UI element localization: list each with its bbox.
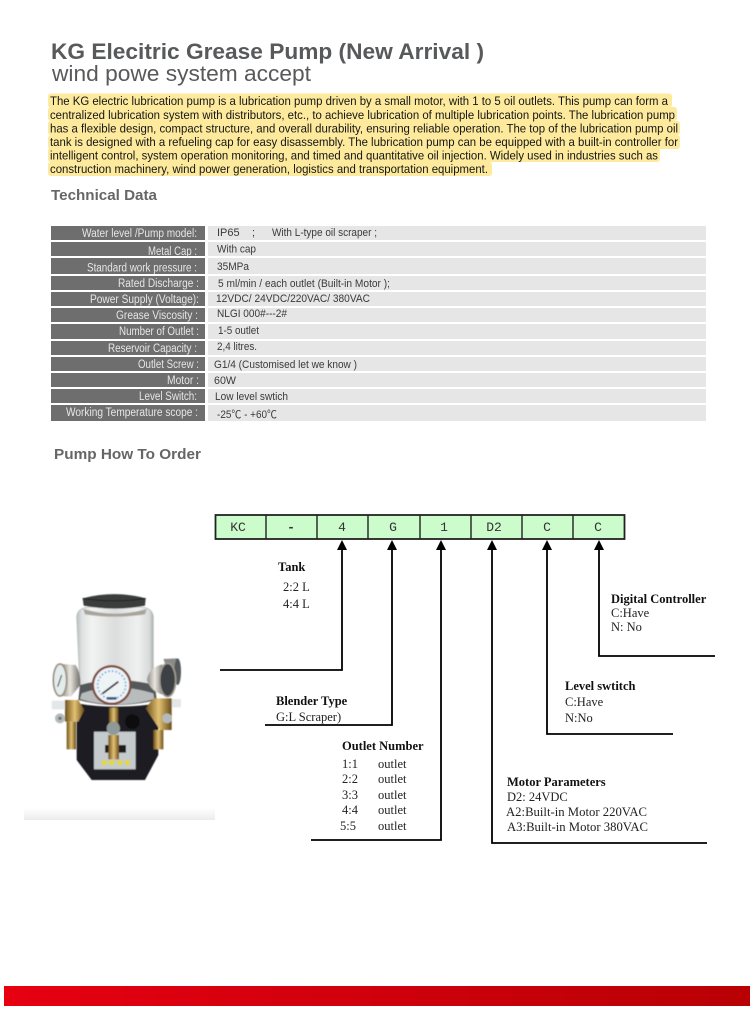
table labels: Metal Cap : <box>148 246 197 258</box>
table labels <box>66 228 199 419</box>
description text block <box>48 94 680 176</box>
description text block: intelligent control, system operation monitoring, and timed and quantitative oil injection. Widely used in industries such as <box>50 148 658 162</box>
right gauge <box>163 658 181 687</box>
text: motor parameters: A3:Built-in Motor 380VAC <box>507 820 648 834</box>
table labels: Grease Viscosity : <box>116 310 198 322</box>
text: blender type: Blender Type <box>276 694 348 708</box>
order code boxes: 4 <box>338 520 346 535</box>
arrow: motor parameters <box>487 540 707 843</box>
base ring <box>78 680 157 705</box>
brass fittings <box>65 700 84 722</box>
footer red bar <box>4 986 750 1006</box>
order code boxes: C <box>543 520 551 535</box>
text: motor parameters: A2:Built-in Motor 220VAC <box>506 805 647 819</box>
text: blender type: G:L Scraper) <box>276 710 341 724</box>
text: digital controller: N: No <box>611 620 642 634</box>
text: motor parameters: D2: 24VDC <box>507 790 568 804</box>
heading: pump how to order: Pump How To Order <box>54 447 201 463</box>
table labels: Reservoir Capacity : <box>108 343 197 355</box>
order code boxes: 1 <box>440 520 448 535</box>
text: motor parameters <box>506 775 648 834</box>
text: outlet number: Outlet Number <box>342 739 424 753</box>
text: outlet number: 3:3 <box>342 788 358 802</box>
table values: 60W <box>214 375 237 387</box>
control panel <box>94 732 136 769</box>
description text block: has a flexible design, compact structure, and overall durability, ensuring reliable operation. The top of the lubrication pump oil <box>50 122 678 136</box>
subtitle: wind powe system accept <box>51 61 312 86</box>
text: digital controller <box>611 592 707 634</box>
description text block: centralized lubrication system with distributors, etc., to achieve lubrication of multiple lubrication points. The lubrication pump <box>50 108 675 122</box>
order code boxes: C <box>594 520 602 535</box>
arrow: tank <box>220 540 347 670</box>
description text block: tank is designed with a refueling cap for easy disassembly. The lubrication pump can be equipped with a built-in controller for <box>50 135 678 149</box>
text: digital controller: C:Have <box>611 606 650 620</box>
text: outlet number: outlet <box>378 757 407 771</box>
text: level switch: C:Have <box>565 695 604 709</box>
text: outlet number: outlet <box>378 788 407 802</box>
table labels: Motor : <box>167 375 199 387</box>
arrow: blender type <box>265 540 397 725</box>
order code boxes: KC <box>230 520 246 535</box>
description text block: The KG electric lubrication pump is a lubrication pump driven by a small motor, with 1 to 5 oil outlets. This pump can form a <box>50 94 668 108</box>
title: KG Elecitric Grease Pump (New Arrival ) <box>51 39 484 64</box>
product photo: grease pump <box>24 594 215 820</box>
text: blender type <box>276 694 348 724</box>
table values: Low level swtich <box>215 391 288 403</box>
order code boxes: D2 <box>486 520 502 535</box>
table labels: Outlet Screw : <box>138 359 199 371</box>
table values: NLGI 000#---2# <box>217 308 288 320</box>
table values: 5 ml/min / each outlet (Built-in Motor ); <box>218 278 390 290</box>
table values: 35MPa <box>217 261 250 273</box>
text: tank <box>278 560 310 611</box>
table labels: Standard work pressure : <box>87 262 197 274</box>
text: digital controller: Digital Controller <box>611 592 707 606</box>
text: motor parameters: Motor Parameters <box>507 775 606 789</box>
side plugs <box>52 701 66 709</box>
technical data table <box>51 226 706 421</box>
table labels: Level Switch: <box>139 391 197 403</box>
text: outlet number: 2:2 <box>342 772 358 786</box>
text: outlet number: 4:4 <box>342 803 359 817</box>
text: level switch: Level swtitch <box>565 679 636 693</box>
text: tank: 2:2 L <box>283 580 310 594</box>
table values: IP65 <box>217 227 240 239</box>
text: outlet number: outlet <box>378 772 407 786</box>
text: level switch <box>565 679 636 725</box>
table labels: Water level /Pump model: <box>82 228 197 240</box>
description text block: construction machinery, wind power generation, logistics and transportation equipment. <box>50 162 488 176</box>
arrow: digital controller <box>594 540 715 656</box>
table labels: Rated Discharge : <box>118 278 199 290</box>
heading: technical data: Technical Data <box>51 187 158 204</box>
table values: -25℃ - +60℃ <box>217 409 277 421</box>
front gauge <box>92 665 132 705</box>
reservoir <box>77 607 153 688</box>
table values: With L-type oil scraper ; <box>272 227 377 239</box>
order code boxes <box>216 515 624 539</box>
cap <box>83 594 146 609</box>
text: outlet number: 1:1 <box>342 757 358 771</box>
table values: 12VDC/ 24VDC/220VAC/ 380VAC <box>216 293 370 305</box>
table values <box>214 227 390 421</box>
arrow: level switch <box>542 540 673 734</box>
pressure knob <box>125 714 140 729</box>
table labels: Working Temperature scope : <box>66 407 198 419</box>
arrow: outlet number <box>311 540 446 840</box>
text: outlet number: 5:5 <box>340 819 356 833</box>
table values: ; <box>252 227 255 239</box>
table labels: Number of Outlet : <box>119 326 199 338</box>
text: outlet number: outlet <box>378 803 407 817</box>
black body <box>77 703 158 780</box>
table values: G1/4 (Customised let we know ) <box>214 359 357 371</box>
order code boxes: - <box>287 520 295 535</box>
table values: With cap <box>217 244 256 256</box>
table values: 2,4 litres. <box>217 341 257 353</box>
text: level switch: N:No <box>565 711 593 725</box>
text: outlet number <box>340 739 424 833</box>
left gauge <box>62 664 80 697</box>
text: tank: Tank <box>278 560 305 574</box>
order code boxes: G <box>389 520 397 535</box>
table labels: Power Supply (Voltage): <box>90 294 199 306</box>
table values: 1-5 outlet <box>218 325 259 337</box>
text: tank: 4:4 L <box>283 597 310 611</box>
text: outlet number: outlet <box>378 819 407 833</box>
